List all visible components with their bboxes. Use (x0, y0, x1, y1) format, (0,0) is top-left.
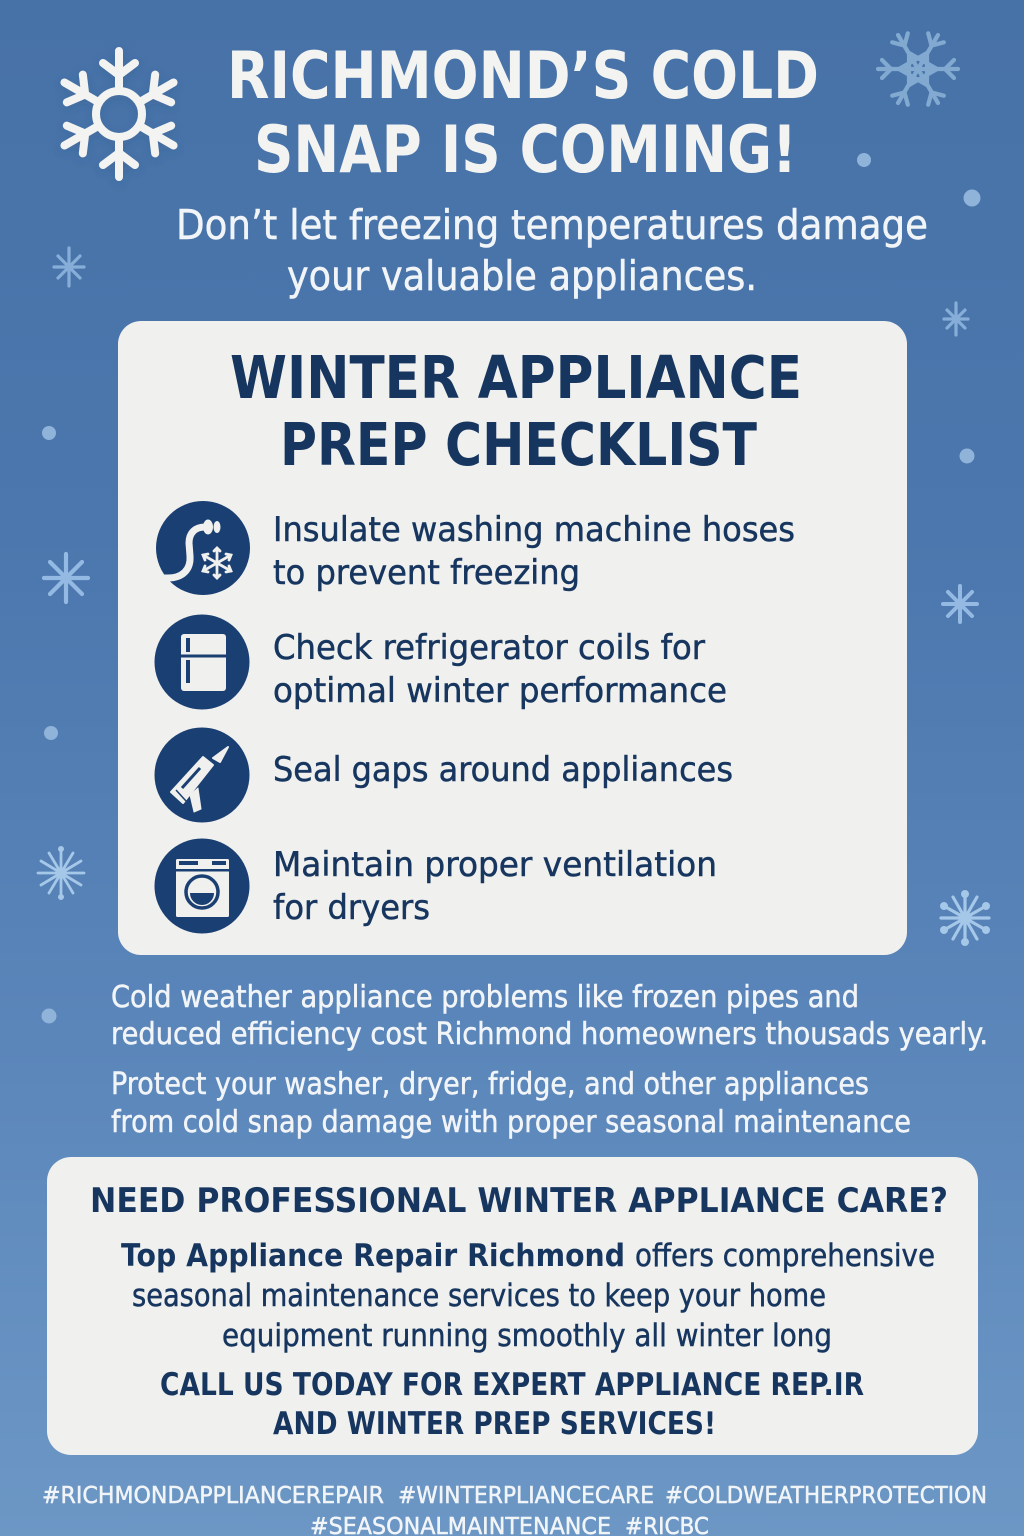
icon: dryer (154, 838, 250, 934)
checklist item 4: for dryers (273, 888, 430, 927)
panel: professional care (47, 1157, 978, 1455)
checklist item 1: Insulate washing machine hoses (273, 510, 795, 549)
checklist item 2: optimal winter performance (273, 671, 727, 710)
hashtags (42, 1483, 987, 1536)
decorative small snowflakes (38, 248, 989, 944)
icon: refrigerator (154, 614, 250, 710)
service description: Top Appliance Repair Richmond (121, 1238, 625, 1274)
checklist heading: WINTER APPLIANCE (230, 343, 802, 412)
icon: top right snowflake (878, 33, 958, 105)
subtitle: Don’t let freezing temperatures damage (176, 201, 928, 249)
title: RICHMOND’S COLD (227, 39, 819, 114)
decorative dots (42, 153, 980, 1024)
call to action: CALL US TODAY FOR EXPERT APPLIANCE REP.IR (160, 1367, 864, 1403)
checklist item 4: Maintain proper ventilation (273, 845, 717, 884)
checklist item 4 (273, 845, 717, 927)
subtitle (176, 201, 928, 300)
hashtags: #WINTERPLIANCECARE (398, 1483, 654, 1509)
hashtags: #COLDWEATHERPROTECTION (665, 1483, 987, 1509)
icon: large white snowflake (56, 51, 182, 177)
checklist item 2 (273, 628, 727, 710)
call to action: AND WINTER PREP SERVICES! (273, 1406, 716, 1442)
icon: hose with snowflake (156, 501, 250, 595)
checklist item 2: Check refrigerator coils for (273, 628, 705, 667)
text block: cold weather problems: Cold weather appliance problems like frozen pipes and (111, 980, 859, 1015)
text block: protect appliances: Protect your washer, dryer, fridge, and other appliances (111, 1067, 869, 1102)
title (227, 39, 819, 188)
icon: caulk gun (154, 728, 250, 822)
service description: equipment running smoothly all winter long (222, 1318, 832, 1354)
service description (121, 1238, 935, 1354)
call to action (160, 1367, 864, 1442)
service description: seasonal maintenance services to keep your home (132, 1278, 826, 1314)
checklist item 3: Seal gaps around appliances (273, 750, 733, 789)
checklist heading (230, 343, 802, 479)
text block: cold weather problems (111, 980, 988, 1052)
panel: checklist (118, 321, 907, 955)
title: SNAP IS COMING! (254, 113, 797, 188)
checklist item 1: to prevent freezing (273, 553, 580, 592)
subtitle: your valuable appliances. (287, 252, 757, 300)
text block: protect appliances (111, 1067, 911, 1140)
hashtags: #RICHMONDAPPLIANCEREPAIR (42, 1483, 384, 1509)
text block: protect appliances: from cold snap damage with proper seasonal maintenance (111, 1105, 911, 1140)
service description: offers comprehensive (635, 1238, 935, 1274)
panel heading: NEED PROFESSIONAL WINTER APPLIANCE CARE? (90, 1181, 948, 1221)
checklist heading: PREP CHECKLIST (280, 410, 757, 479)
checklist item 1 (273, 510, 795, 592)
